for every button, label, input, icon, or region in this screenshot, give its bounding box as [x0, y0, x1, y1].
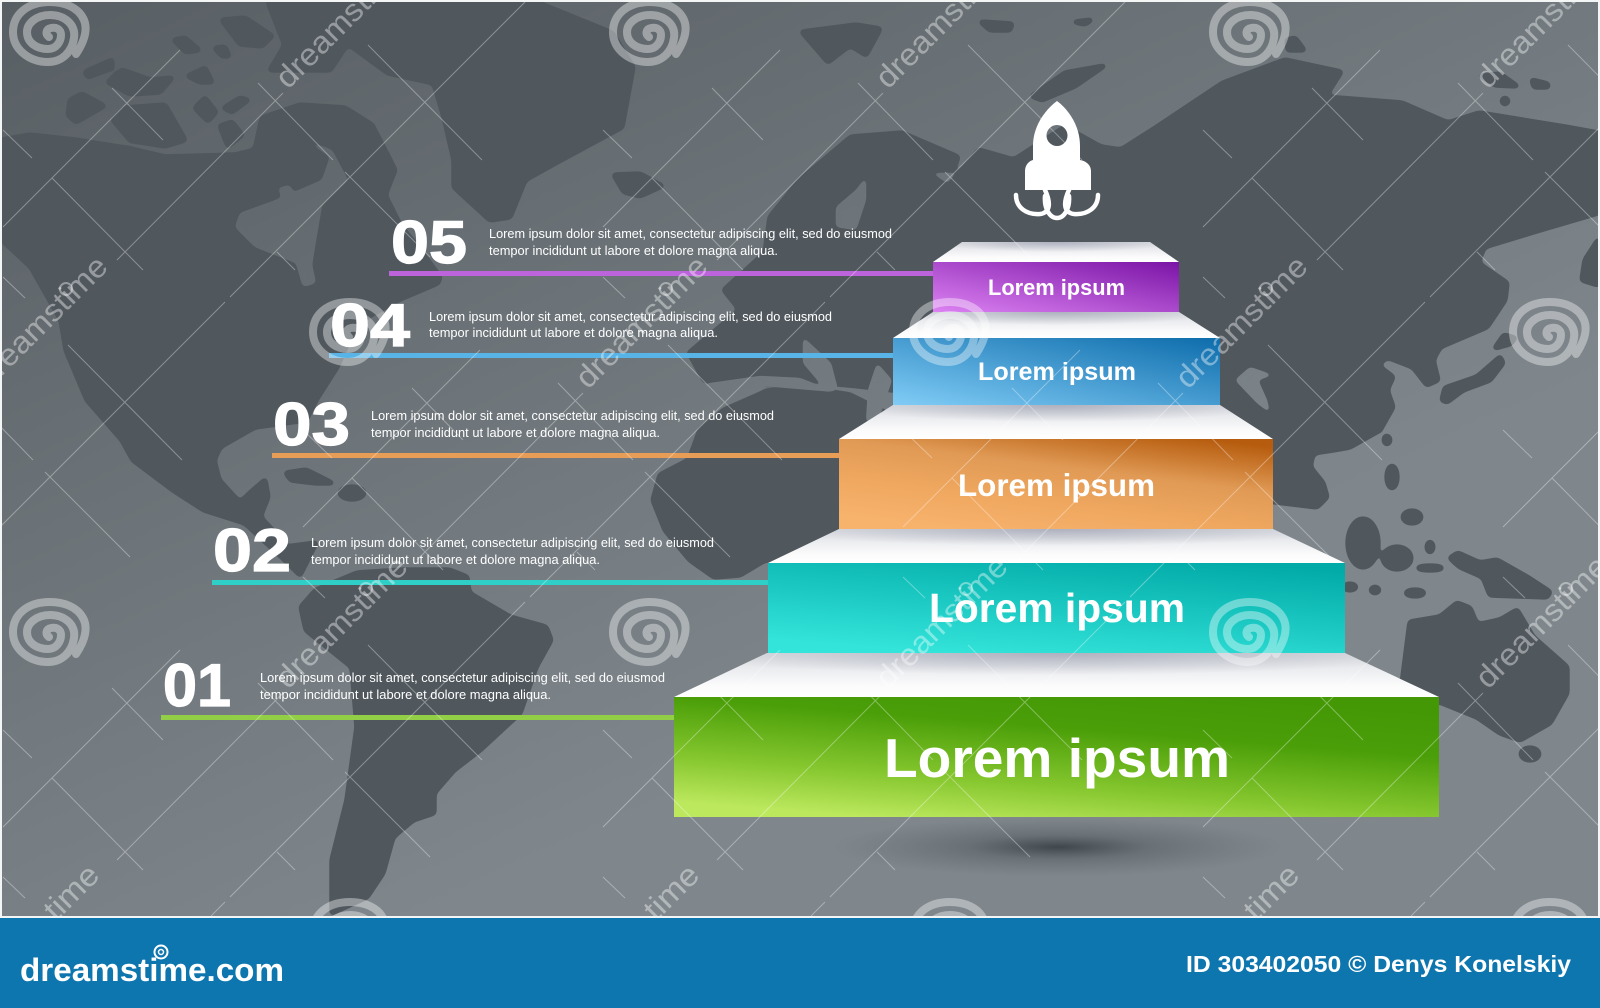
description 03: tempor incididunt ut labore et dolore magna aliqua. — [371, 425, 660, 440]
connector line 03 — [272, 453, 840, 458]
description 02 — [311, 535, 714, 567]
row 03 — [272, 391, 840, 458]
number 04: 04 — [330, 292, 411, 359]
watermark overlay: time — [36, 857, 106, 927]
map: north america — [2, 105, 440, 575]
map: australia — [1400, 603, 1567, 740]
footer logo: dreamstime.com — [20, 952, 284, 988]
floor shadow — [833, 817, 1283, 877]
number 03: 03 — [273, 391, 350, 458]
icon: rocket — [1016, 101, 1098, 218]
description 01: Lorem ipsum dolor sit amet, consectetur adipiscing elit, sed do eiusmod — [260, 670, 665, 685]
row 01 — [161, 652, 675, 720]
map: eurasia — [689, 60, 1598, 507]
map: indonesia and philippines — [1344, 436, 1442, 596]
step 04: blue: Lorem ipsum — [978, 358, 1136, 386]
connector line 05 — [389, 271, 934, 276]
map: greenland — [347, 2, 633, 220]
description 05: tempor incididunt ut labore et dolore magna aliqua. — [489, 243, 778, 258]
map: africa — [653, 388, 900, 577]
step 02: teal — [768, 529, 1345, 653]
description 02: tempor incididunt ut labore et dolore magna aliqua. — [311, 552, 600, 567]
description 03: Lorem ipsum dolor sit amet, consectetur adipiscing elit, sed do eiusmod — [371, 408, 774, 423]
step 03: orange — [839, 405, 1273, 529]
map: arctic russia islands — [802, 20, 1598, 285]
map: caribbean — [286, 470, 364, 499]
step 01: green: Lorem ipsum — [884, 727, 1230, 789]
footer credit: ID 303402050 © Denys Konelskiy — [1186, 951, 1571, 977]
number 02: 02 — [213, 517, 291, 584]
number 01: 01 — [163, 652, 231, 719]
footer banner — [0, 918, 1600, 1008]
map: japan — [1442, 357, 1503, 402]
map: arctic islands — [68, 2, 355, 146]
connector line 02 — [212, 580, 769, 585]
step 05: purple — [933, 242, 1179, 312]
step 05: purple: Lorem ipsum — [988, 275, 1125, 300]
description 04: Lorem ipsum dolor sit amet, consectetur adipiscing elit, sed do eiusmod — [429, 309, 832, 324]
connector line 04 — [329, 353, 894, 358]
watermark overlay: time — [636, 857, 706, 927]
step 04: blue — [893, 312, 1220, 405]
row 02 — [212, 517, 769, 585]
description 02: Lorem ipsum dolor sit amet, consectetur adipiscing elit, sed do eiusmod — [311, 535, 714, 550]
description 01 — [260, 670, 665, 702]
step 02: teal: Lorem ipsum — [929, 585, 1185, 631]
row 05 — [389, 209, 934, 276]
map: iceland — [614, 174, 662, 196]
number 05: 05 — [391, 209, 467, 276]
pyramid — [674, 242, 1439, 817]
map: tasmania — [1521, 748, 1539, 760]
description 04: tempor incididunt ut labore et dolore magna aliqua. — [429, 325, 718, 340]
map: sakhalin — [1495, 335, 1515, 348]
map: new guinea — [1450, 553, 1550, 597]
description 04 — [429, 309, 832, 340]
description 01: tempor incididunt ut labore et dolore magna aliqua. — [260, 687, 551, 702]
row 04 — [329, 292, 894, 359]
description 05: Lorem ipsum dolor sit amet, consectetur adipiscing elit, sed do eiusmod — [489, 226, 892, 241]
map: inland seas — [235, 140, 1273, 423]
watermark overlay: time — [1236, 857, 1306, 927]
step 01: green — [674, 653, 1439, 817]
connector line 01 — [161, 715, 675, 720]
description 03 — [371, 408, 774, 440]
description 05 — [489, 226, 892, 258]
map: south america — [301, 570, 551, 913]
step 03: orange: Lorem ipsum — [958, 467, 1155, 503]
